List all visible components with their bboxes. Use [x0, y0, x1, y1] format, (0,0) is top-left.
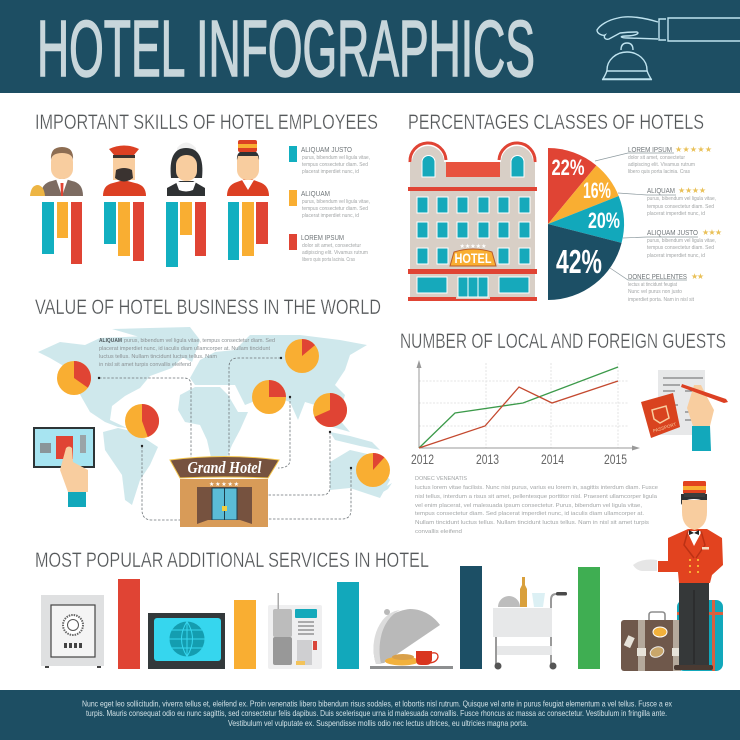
icon: receptionist: [30, 147, 83, 196]
footer text: [82, 700, 672, 728]
pie labels: tempus consectetur diam. Sed: [647, 204, 714, 210]
pie chart: hotel classes: [548, 148, 624, 300]
footer: [0, 690, 740, 740]
icon: bellhop: [227, 140, 269, 196]
icon: room service trolley: [493, 577, 567, 670]
icon: grand hotel: [170, 456, 279, 527]
icon: doorman: [103, 146, 146, 196]
map text: purus, bibendum vel ligula vitae, tempus consectetur diam. Sed: [124, 338, 275, 344]
pie labels: placerat imperdiet nunc, id: [647, 253, 705, 259]
world map: [38, 327, 392, 505]
pie labels: ★★★★★: [675, 145, 712, 154]
text block: guests: nisl tellus, interdum a risus sit amet, pellentesque porttitor nisl. Praesent ullamcorper ligula: [415, 494, 658, 500]
footer text: Vestibulum vel vulputate ex. Suspendisse mollis odio nec lectus ultrices, eu ultricies magna porta.: [228, 719, 528, 728]
bar: orange: [234, 600, 256, 669]
icon: telephone: [268, 593, 322, 669]
icon: grand hotel: Grand Hotel: [188, 458, 262, 477]
icon: grand hotel: ★★★★★: [209, 481, 239, 488]
legend: tempus consectetur diam. Sed: [302, 206, 368, 212]
bar: navy: [460, 566, 482, 669]
bar: red: [118, 579, 140, 669]
text block: guests: luctus lorem vitae facilisis. Nunc nisi purus, varius eu lorem in, sagittis interdum diam. Fusce: [415, 485, 658, 491]
text block: guests: Nullam tincidunt luctus tellus. Nullam tincidunt luctus tellus. Nam in nisl sit amet turpis: [415, 520, 649, 526]
icon: hotel building: HOTEL: [454, 250, 492, 266]
legend: ALIQUAM JUSTO: [301, 147, 352, 154]
pie labels: ★★: [691, 272, 704, 281]
pie labels: ALIQUAM JUSTO: [647, 230, 698, 237]
heading: services: MOST POPULAR ADDITIONAL SERVICES IN HOTEL: [35, 549, 429, 572]
pie chart: hotel classes: 42%: [556, 243, 602, 280]
pie chart: hotel classes: 20%: [588, 208, 620, 233]
bar: teal: [337, 582, 359, 669]
map pies: [57, 339, 390, 487]
map text: in nisl sit amet turpis convallis eleifend: [99, 362, 191, 368]
line chart: guests: 2014: [541, 451, 564, 467]
pie labels: adipiscing elit. Vivamus rutrum: [628, 162, 695, 168]
pie labels: DONEC PELLENTES: [628, 274, 687, 281]
icon: hotel building: ★★★★★: [460, 243, 486, 250]
illustration: bellboy: [633, 481, 723, 670]
line chart: guests: 2013: [476, 451, 499, 467]
bar: green: [578, 567, 600, 669]
map text: placerat imperdiet nunc, id iaculis diam ullamcorper at. Nullam tincidunt: [99, 346, 270, 352]
legend: adipiscing elit. Vivamus rutrum: [302, 250, 368, 256]
legend: dolor sit amet, consectetur: [302, 243, 361, 249]
icon: luggage: [621, 600, 723, 671]
legend: LOREM IPSUM: [301, 235, 344, 242]
bar chart: employee skills: [42, 202, 268, 267]
legend: placerat imperdiet nunc, id: [302, 213, 359, 219]
dashed connectors: [98, 357, 352, 520]
header banner: [0, 0, 740, 93]
line chart: guests: 2015: [604, 451, 627, 467]
pie labels: [595, 145, 722, 303]
pie labels: purus, bibendum vel ligula vitae,: [647, 196, 716, 202]
text block: guests: DONEC VENENATIS: [415, 476, 467, 482]
pie labels: placerat imperdiet nunc, id: [647, 211, 705, 217]
map text: [99, 338, 275, 368]
pie chart: hotel classes: 16%: [583, 178, 611, 203]
pie chart: hotel classes: 22%: [552, 155, 584, 180]
pie labels: ALIQUAM: [647, 188, 675, 195]
legend: purus, bibendum vel ligula vitae,: [302, 199, 370, 205]
panel: hotel employees: [30, 140, 370, 267]
pie labels: purus, bibendum vel ligula vitae,: [647, 238, 716, 244]
text block: guests: convallis eleifend: [415, 529, 462, 535]
icon: safe: [41, 595, 104, 668]
icon: tablet with hand: [33, 427, 95, 507]
pie labels: lectus at tincidunt feugiat: [628, 282, 677, 288]
pie labels: imperdiet porta. Nam in nisl sit: [628, 297, 694, 303]
heading: value: VALUE OF HOTEL BUSINESS IN THE WORLD: [35, 296, 381, 319]
pie labels: tempus consectetur diam. Sed: [647, 245, 714, 251]
icon: hand ringing service bell: [597, 17, 740, 80]
icon: hotel building: [408, 143, 537, 301]
text block: guests: tempus consectetur diam. Sed placerat imperdiet nunc, id iaculis diam ullamcorper at.: [415, 511, 644, 517]
icon: passport and form: [641, 370, 728, 451]
map text: luctus tellus. Nullam tincidunt luctus tellus. Nam: [99, 354, 217, 360]
line chart: guests: 2012: [411, 451, 434, 467]
legend: libero quis porta lacinia. Cras: [302, 257, 355, 263]
legend: placerat imperdiet nunc, id: [302, 169, 359, 175]
map text: ALIQUAM: [99, 338, 122, 344]
legend: ALIQUAM: [301, 191, 330, 198]
icon: cloche and meal: [370, 609, 453, 669]
icon: monitor: [148, 613, 225, 669]
line chart: guests: [411, 360, 640, 467]
text block: guests: [415, 476, 658, 535]
pie labels: LOREM IPSUM: [628, 147, 672, 154]
pie labels: ★★★★: [678, 186, 706, 195]
heading: skills: IMPORTANT SKILLS OF HOTEL EMPLOYEES: [35, 111, 378, 134]
pie labels: Nunc vel purus non justo: [628, 289, 682, 295]
pie labels: dolor sit amet, consectetur: [628, 155, 685, 161]
icon: maid: [167, 142, 205, 196]
text block: guests: vel enim placerat, vel malesuada ipsum consectetur. Purus, bibendum vel ligula vitae,: [415, 503, 642, 509]
pie labels: libero quis porta lacinia. Cras: [628, 169, 690, 175]
legend: purus, bibendum vel ligula vitae,: [302, 155, 370, 161]
icon: passport and form: PASSPORT: [652, 422, 677, 433]
legend: [289, 146, 370, 263]
pie labels: ★★★: [702, 228, 722, 237]
legend: tempus consectetur diam. Sed: [302, 162, 368, 168]
